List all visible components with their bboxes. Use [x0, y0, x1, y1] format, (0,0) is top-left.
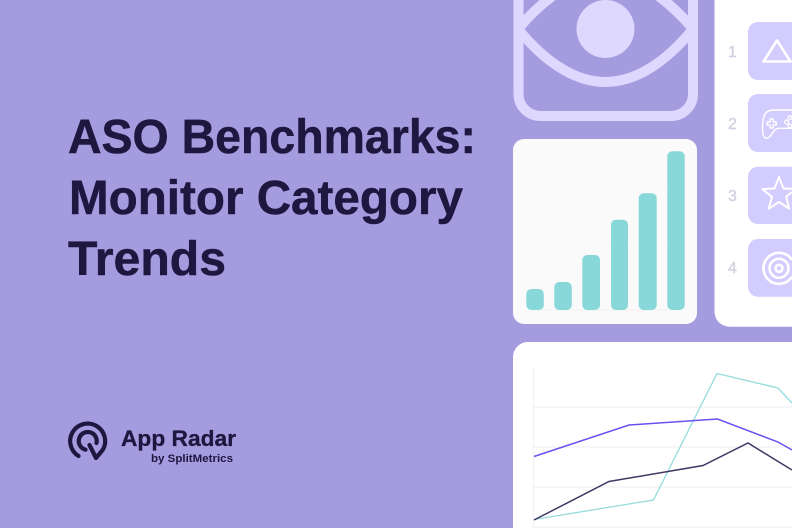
line: dark series [534, 443, 792, 520]
rank numbers: 4 [728, 260, 737, 277]
panel: category ranking [714, 0, 792, 327]
category tiles [748, 22, 792, 297]
title [68, 111, 476, 286]
panel: bar chart [513, 139, 697, 324]
icon: star [762, 177, 792, 209]
line: teal series [534, 374, 792, 520]
icon: gamepad [762, 110, 792, 138]
title: Monitor Category [69, 172, 463, 225]
rank numbers: 1 [728, 44, 737, 61]
icon: eye tile [518, 0, 693, 116]
rank numbers: 3 [728, 188, 737, 205]
icon: radar [70, 424, 105, 458]
title: Trends [68, 233, 226, 286]
rank numbers [728, 44, 737, 277]
pupil [576, 0, 634, 58]
icon: target [764, 253, 792, 284]
bars [526, 151, 685, 310]
brand name: App Radar [121, 426, 236, 451]
icon: triangle [764, 40, 790, 62]
logo: App Radar by SplitMetrics [70, 424, 236, 465]
brand subtitle: by SplitMetrics [151, 453, 233, 465]
rank numbers: 2 [728, 116, 737, 133]
panel: line chart [513, 342, 792, 528]
title: ASO Benchmarks: [68, 111, 476, 164]
line: violet series [534, 419, 792, 456]
